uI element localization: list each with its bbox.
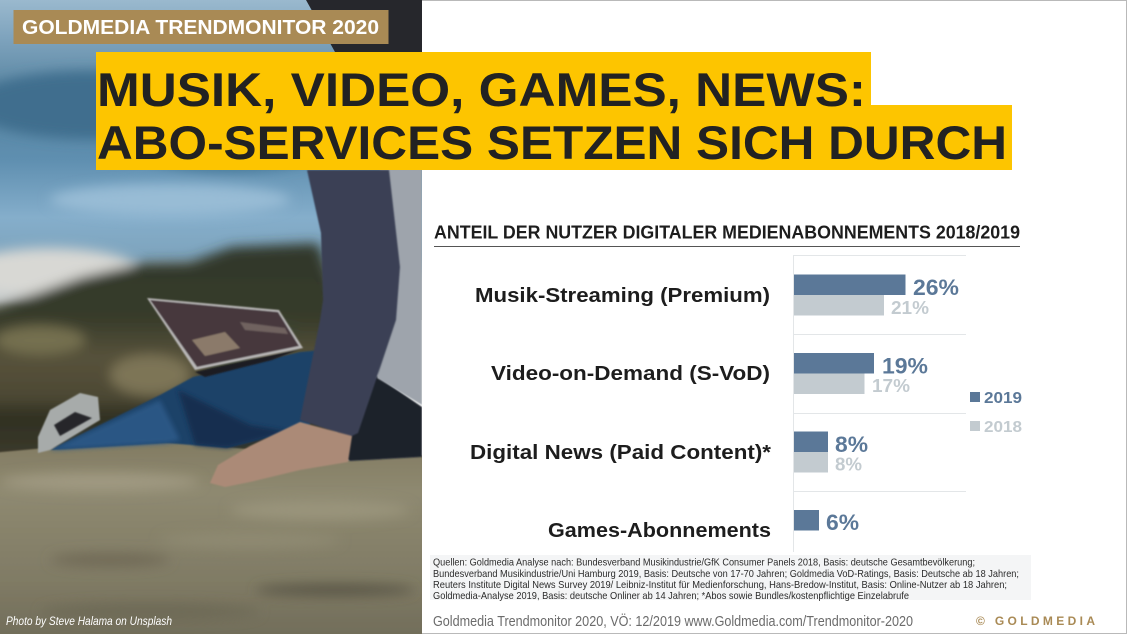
page frame	[422, 0, 1126, 634]
photo credit: Photo by Steve Halama on Unsplash	[6, 614, 172, 628]
legend: 2019	[984, 390, 1022, 407]
badge: Goldmedia Trendmonitor 2020: GOLDMEDIA TRENDMONITOR 2020	[22, 17, 379, 39]
row: Digital News	[470, 432, 868, 474]
row: Musik-Streaming: 21%	[891, 298, 929, 318]
title: ABO-SERVICES SETZEN SICH DURCH	[97, 116, 1007, 169]
sources note	[430, 555, 1031, 602]
sources note: Goldmedia-Analyse 2019, Basis: deutsche Onliner ab 14 Jahren; *Abos sowie Bundles/kostenpflichtige Einzelabrufe	[433, 590, 909, 602]
row: Video-on-Demand: Video-on-Demand (S-VoD)	[491, 363, 770, 385]
icon: sleeve	[300, 170, 400, 437]
icon: shoe	[38, 393, 100, 453]
icon: black pants	[335, 376, 422, 461]
title: MUSIK, VIDEO, GAMES, NEWS:	[97, 63, 866, 116]
photo: person with laptop on a rock	[0, 0, 432, 634]
row: Musik-Streaming: Musik-Streaming (Premium)	[475, 285, 770, 307]
icon: laptop	[147, 298, 303, 377]
row: Games-Abonnements: Games-Abonnements	[548, 520, 771, 542]
bar chart	[470, 255, 966, 552]
icon: dark top	[306, 0, 422, 52]
sources note: Reuters Institute Digital News Survey 2019/ Leibniz-Institut für Medienforschung, Hans-Bredow-Institut, Basis: Online-Nutzer ab 18 Jahren;	[433, 579, 1007, 591]
row: Video-on-Demand: 17%	[872, 376, 910, 396]
legend: 2018	[984, 419, 1022, 436]
sources note: Quellen: Goldmedia Analyse nach: Bundesverband Musikindustrie/GfK Consumer Panels 2018, Basis: deutsche Gesamtbevölkerung;	[433, 556, 975, 568]
row: Musik-Streaming: 26%	[913, 275, 959, 300]
row: Video-on-Demand: 19%	[882, 354, 928, 378]
badge: Goldmedia Trendmonitor 2020	[14, 10, 388, 44]
title	[96, 52, 1012, 170]
row: Digital News: Digital News (Paid Content)*	[470, 442, 771, 464]
icon: hand	[210, 422, 352, 487]
row: Games-Abonnements: 6%	[826, 510, 859, 535]
legend	[970, 390, 1022, 436]
footer citation: Goldmedia Trendmonitor 2020, VÖ: 12/2019 www.Goldmedia.com/Trendmonitor-2020	[433, 612, 913, 630]
icon: jeans	[50, 350, 322, 450]
icon: rock ground	[0, 442, 432, 634]
icon: jeans fold	[50, 400, 180, 450]
row: Games-Abonnements	[548, 510, 859, 542]
row: Digital News: 8%	[835, 454, 862, 474]
icon: jeans shadow	[178, 390, 290, 448]
row: Digital News: 8%	[835, 432, 868, 457]
sources note: Bundesverband Musikindustrie/Uni Hamburg 2019, Basis: Deutsche von 17-70 Jahren; Goldmedia VoD-Ratings, Basis: Deutsche ab 18 Jahren;	[433, 568, 1019, 580]
chart heading: ANTEIL DER NUTZER DIGITALER MEDIENABONNEMENTS 2018/2019	[434, 222, 1020, 242]
row: Video-on-Demand	[491, 353, 928, 396]
icon: shoe laces	[54, 412, 92, 436]
icon: grey shirt	[377, 165, 422, 405]
row: Musik-Streaming	[475, 274, 959, 318]
footer logo: © GOLDMEDIA	[976, 614, 1095, 628]
